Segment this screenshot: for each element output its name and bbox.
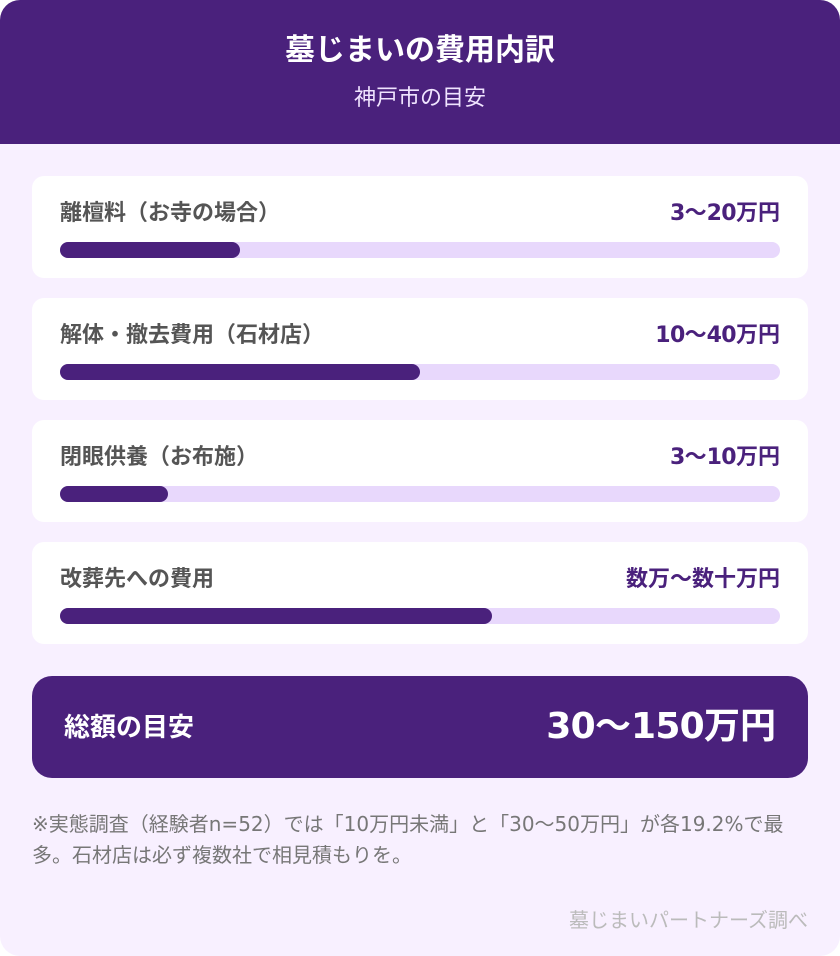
value: 10～40万円 [655,323,780,348]
panel: closing memorial service [32,420,808,522]
panel: demolition cost [32,298,808,400]
label: 閉眼供養（お布施） [60,445,258,470]
panel: total estimate [32,676,808,778]
bar [60,608,780,624]
value: 3～10万円 [670,445,780,470]
label: 解体・撤去費用（石材店） [60,323,324,348]
header band [0,0,840,144]
bar [60,242,780,258]
bar [60,486,780,502]
panel: reburial destination cost [32,542,808,644]
subtitle: 神戸市の目安 [354,86,486,111]
total value: 30～150万円 [546,706,776,747]
bar [60,364,780,380]
label: 離檀料（お寺の場合） [60,201,280,226]
value: 数万～数十万円 [626,567,780,592]
note text: ※実態調査（経験者n=52）では「10万円未満」と「30～50万円」が各19.2%で最多。石材店は必ず複数社で相見積もりを。 [32,812,784,867]
panel: temple removal fee [32,176,808,278]
label: 改葬先への費用 [60,567,214,592]
source credit: 墓じまいパートナーズ調べ [569,908,808,932]
total label: 総額の目安 [64,713,194,743]
value: 3～20万円 [670,201,780,226]
title: 墓じまいの費用内訳 [285,33,555,68]
